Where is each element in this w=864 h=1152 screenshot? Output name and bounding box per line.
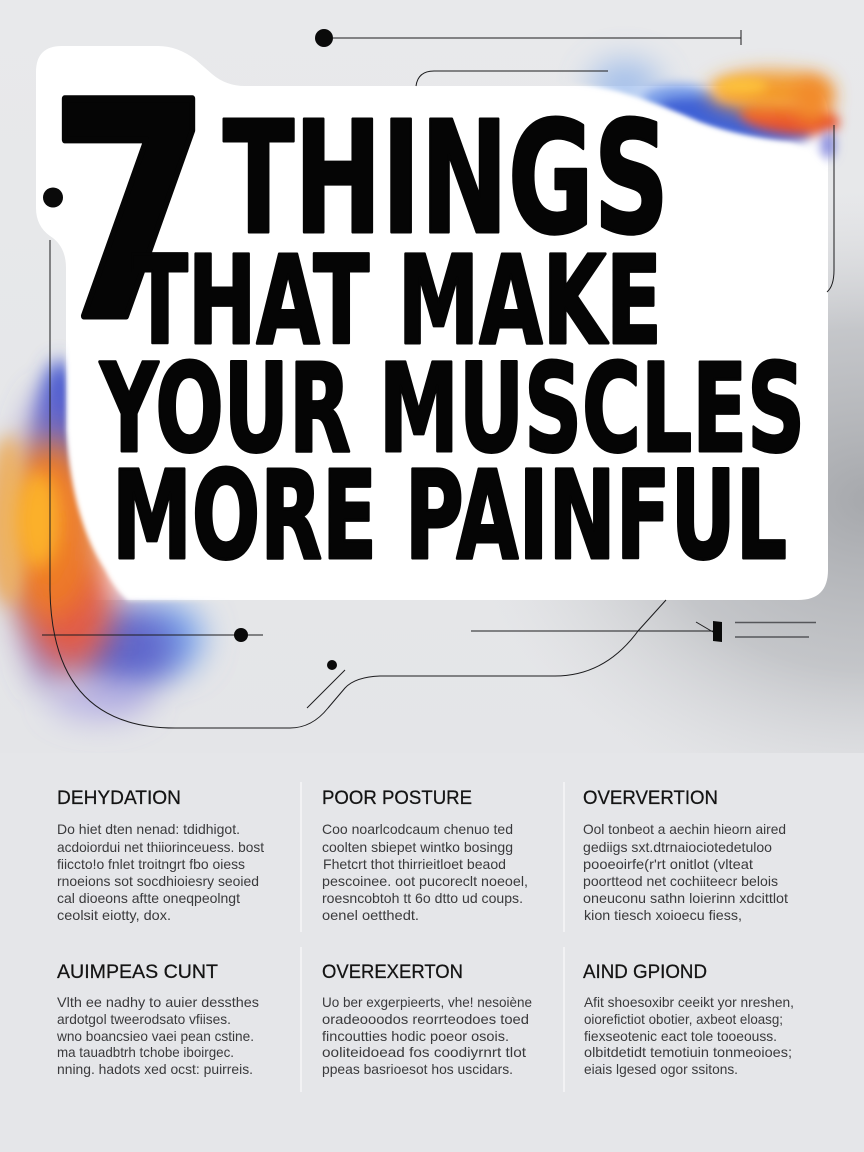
card: auimpeas cunt: AUIMPEAS CUNT [57,962,218,983]
card: overexerton: Uo ber exgerpieerts, vhe! nesoiène [322,994,532,1010]
small dot and diagonal [307,660,345,708]
gradient blob: lower left [0,360,204,720]
card: aind gpiond: olbitdetidt temotiuin tonmeoioes; [584,1044,792,1060]
card: aind gpiond: eiais lgesed ogor ssitons. [584,1061,738,1077]
title [49,40,805,587]
card: aind gpiond: oiorefictiot obotier, axbeot eloasg; [584,1011,783,1027]
card: oververtion: oneuconu sathn loierinn xdcittlot [583,890,788,906]
card: overexerton: OVEREXERTON [322,962,463,983]
card: auimpeas cunt: Vlth ee nadhy to auier dessthes [57,994,259,1010]
card: oververtion: Ool tonbeot a aechin hieorn aired [583,821,786,837]
panel frame line top [416,71,608,86]
card: poor posture: oenel oetthedt. [322,907,419,923]
card: poor posture: roesncobtoh tt 6o dtto ud coups. [322,890,523,906]
card: dehydration: cal dioeons aftte oneqpeolngt [57,890,240,906]
card: dehydration: fiiccto!o fnlet troitngrt fbo oiess [57,856,245,872]
card: overexerton: fincoutties hodic poeor osois. [322,1028,509,1044]
card: auimpeas cunt: ma tauadbtrh tchobe iboirgec. [57,1044,234,1060]
gradient blob: top right [589,61,841,159]
card: poor posture: POOR POSTURE [322,788,472,809]
card: oververtion: pooeoirfe(r'rt onitlot (vlteat [583,856,753,872]
card: oververtion: OVERVERTION [583,788,718,809]
card: dehydration: rnoeions sot socdhioiesry seoied [57,873,259,889]
card: oververtion: kion tiesch xoioecu fiess, [584,907,742,923]
card: dehydration: DEHYDATION [57,788,181,809]
big numeral 7: 7 [49,40,211,387]
card: dehydration [57,788,264,923]
white title panel [36,46,828,600]
card: oververtion: gediigs sxt.dtrnaiociotedetuloo [583,839,772,855]
card: aind gpiond [583,962,794,1077]
card: aind gpiond: Afit shoesoxibr ceeikt yor nreshen, [584,994,794,1010]
card: aind gpiond: AIND GPIOND [583,962,707,983]
card: poor posture: pescoinee. oot pucoreclt noeoel, [322,873,528,889]
card: auimpeas cunt [56,962,259,1077]
card: poor posture: Coo noarlcodcaum chenuo ted [322,821,513,837]
card: auimpeas cunt: nning. hadots xed ocst: puirreis. [57,1061,253,1077]
card: oververtion [583,788,788,923]
right marker lines [471,621,816,642]
card: overexerton: ppeas basrioesot hos uscidars. [322,1061,513,1077]
card: overexerton: oradeooodos reorrteodoes toed [322,1011,529,1027]
panel frame line right [827,125,834,292]
left line with dot [42,628,263,642]
long frame curve [50,240,666,728]
card: oververtion: poortteod net cochiiteecr belois [583,873,778,889]
card: poor posture: Fhetcrt thot thirrieitloet beaod [323,856,506,872]
card: aind gpiond: fiexseotenic eact tole tooeouss. [584,1028,777,1044]
column dividers [301,782,564,1092]
card: overexerton [322,962,532,1077]
connector lines and dots [42,29,834,728]
card: poor posture: coolten sbiepet wintko bosingg [322,839,513,855]
card: poor posture [322,788,528,923]
card: dehydration: ceolsit eiotty, dox. [57,907,171,923]
card: dehydration: Do hiet dten nenad: tdidhigot. [57,821,240,837]
lower text section [0,753,864,1152]
top timeline with dot [315,29,741,47]
panel dot [43,188,63,208]
card: auimpeas cunt: ardotgol tweerodsato vfiises. [57,1011,231,1027]
card: auimpeas cunt: wno boancsieo vaei pean cstine. [56,1028,254,1044]
card: overexerton: ooliteidoead fos coodiyrnrt tlot [322,1044,526,1060]
card: dehydration: acdoiordui net thiiorinceuess. bost [57,839,264,855]
